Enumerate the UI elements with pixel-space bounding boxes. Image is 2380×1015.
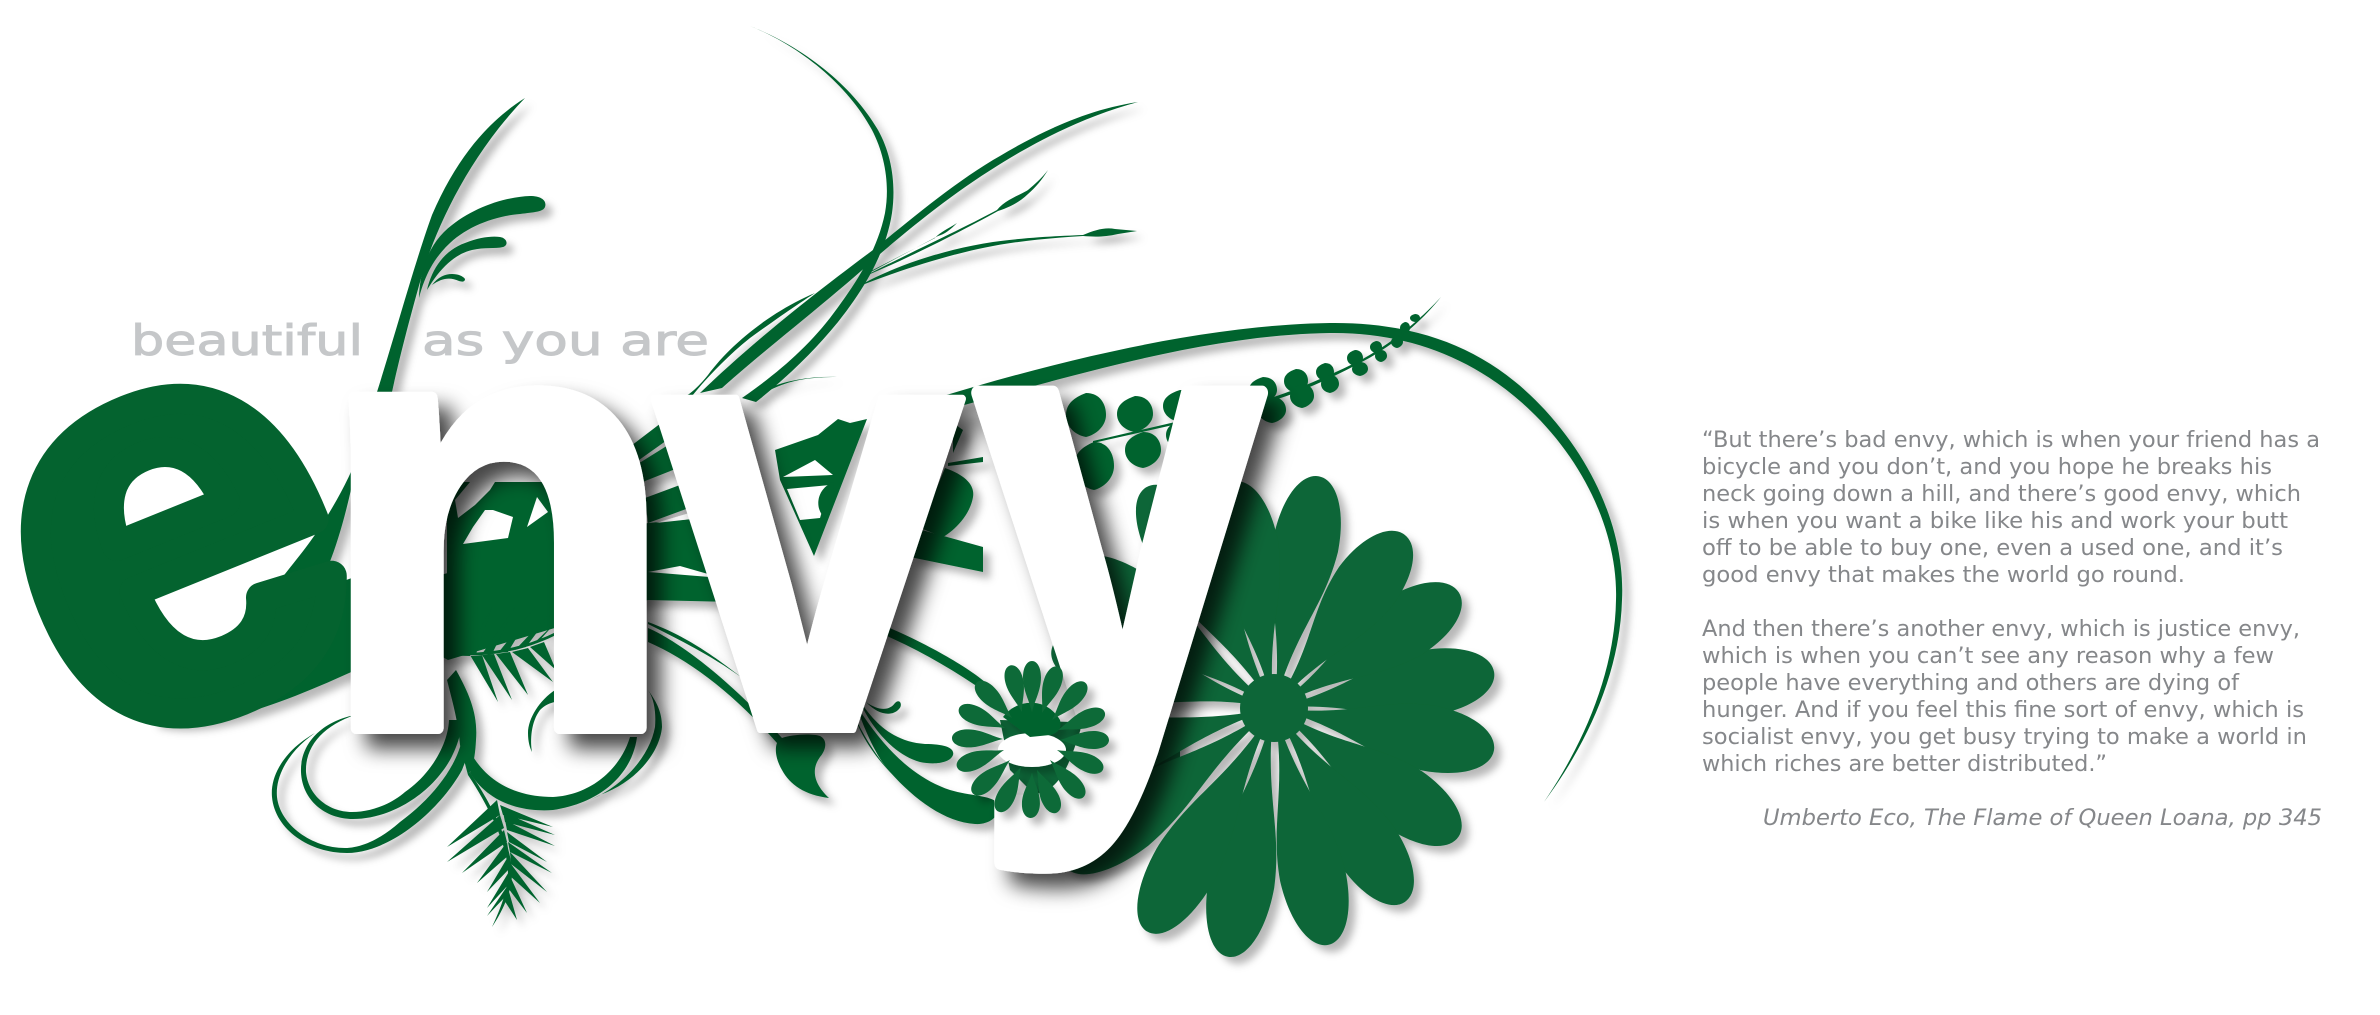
lower fern — [447, 770, 555, 927]
quotation text: good envy that makes the world go round. — [1702, 563, 2185, 588]
quotation text: hunger. And if you feel this fine sort of envy, which is — [1702, 698, 2304, 723]
swash of the e and central band — [150, 419, 1180, 800]
lower left loops — [272, 670, 662, 853]
letters n v y of the title — [315, 151, 1268, 874]
quotation text: off to be able to buy one, even a used one, and it’s — [1702, 536, 2283, 561]
botanical artwork — [150, 26, 1622, 927]
large daisy flower — [1011, 470, 1500, 963]
quotation text: neck going down a hill, and there’s good envy, which — [1702, 482, 2301, 507]
quotation text: And then there’s another envy, which is justice envy, — [1702, 617, 2300, 642]
quotation text: bicycle and you don’t, and you hope he breaks his — [1702, 455, 2272, 480]
quotation text: “But there’s bad envy, which is when your friend has a — [1702, 428, 2320, 453]
letters n v y of the title: v — [652, 163, 968, 861]
tagline: beautiful as you are: as you are — [422, 316, 709, 365]
tagline: beautiful as you are: beautiful — [131, 316, 363, 365]
big sweeping arc on the right — [930, 323, 1622, 802]
flourish blades to the right of the v — [852, 624, 999, 824]
leaf and stripe inside the v — [785, 475, 835, 518]
quotation text: is when you want a bike like his and work your butt — [1702, 509, 2288, 534]
small flower overlapping the y — [952, 661, 1109, 818]
grass blades at top centre — [682, 26, 1138, 402]
attribution: Umberto Eco, The Flame of Queen Loana, pp 345 — [1763, 806, 2322, 831]
sprig: upper left stem with curled leaves — [377, 98, 545, 392]
quotation text: which is when you can’t see any reason why a few — [1702, 644, 2274, 669]
white gaps in the central band — [455, 460, 833, 578]
quotation text — [1702, 428, 2320, 777]
vine with paired leaves — [1066, 297, 1441, 490]
bud flourish beneath the v — [648, 622, 829, 798]
tagline: beautiful as you are — [131, 316, 709, 365]
letters n v y of the title: n — [315, 163, 678, 861]
letters n v y of the title: y — [973, 151, 1268, 874]
fern inside the n — [447, 607, 556, 702]
quotation text: socialist envy, you get busy trying to make a world in — [1702, 725, 2307, 750]
quotation text: which riches are better distributed.” — [1702, 752, 2107, 777]
quotation text: people have everything and others are dying of — [1702, 671, 2240, 696]
